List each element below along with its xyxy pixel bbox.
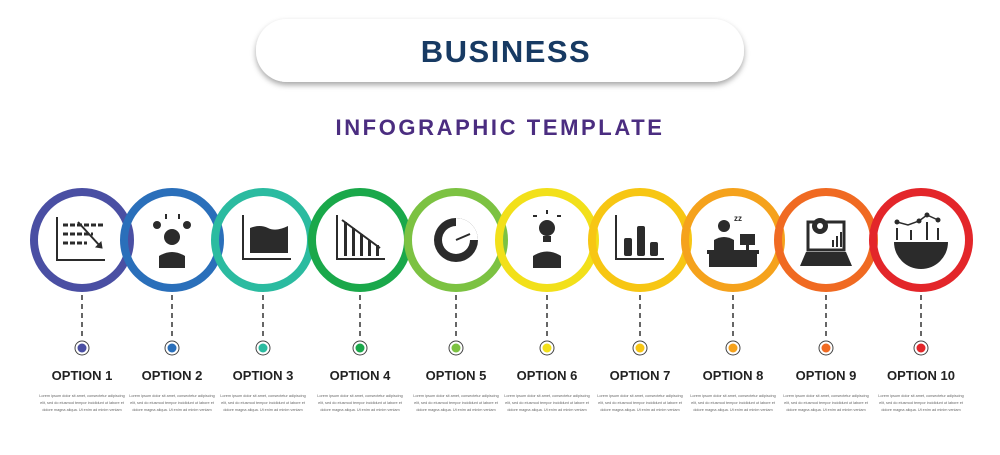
option 6: elit, sed do eiusmod tempor incididunt ut labore et bbox=[505, 401, 590, 405]
option 9 bbox=[778, 192, 874, 412]
icon: falling bars bbox=[337, 215, 385, 259]
option 9: dolore magna aliqua. Ut enim ad minim veniam bbox=[786, 408, 866, 412]
option 1: Lorem ipsum dolor sit amet, consectetur adipiscing bbox=[39, 394, 125, 398]
option 1 bbox=[34, 192, 130, 412]
option 1: dolore magna aliqua. Ut enim ad minim veniam bbox=[42, 408, 122, 412]
option 2: dolore magna aliqua. Ut enim ad minim veniam bbox=[132, 408, 212, 412]
option 8 bbox=[685, 192, 781, 412]
option 10: elit, sed do eiusmod tempor incididunt ut labore et bbox=[879, 401, 964, 405]
option 8: elit, sed do eiusmod tempor incididunt ut labore et bbox=[691, 401, 776, 405]
icon: sleeping worker at desk: zz bbox=[734, 214, 742, 223]
option 4: dolore magna aliqua. Ut enim ad minim veniam bbox=[320, 408, 400, 412]
option 5: Lorem ipsum dolor sit amet, consectetur adipiscing bbox=[413, 394, 499, 398]
option 7: Lorem ipsum dolor sit amet, consectetur adipiscing bbox=[597, 394, 683, 398]
option 6 bbox=[499, 192, 595, 412]
subtitle: INFOGRAPHIC TEMPLATE bbox=[335, 115, 665, 140]
option 8: dolore magna aliqua. Ut enim ad minim veniam bbox=[693, 408, 773, 412]
option 5: elit, sed do eiusmod tempor incididunt ut labore et bbox=[414, 401, 499, 405]
icon: coin stacks bbox=[616, 215, 664, 259]
option 2: elit, sed do eiusmod tempor incididunt ut labore et bbox=[130, 401, 215, 405]
option 1: elit, sed do eiusmod tempor incididunt ut labore et bbox=[40, 401, 125, 405]
icon: laptop analytics bbox=[800, 218, 852, 266]
option 6: OPTION 6 bbox=[517, 368, 577, 383]
option 7: elit, sed do eiusmod tempor incididunt ut labore et bbox=[598, 401, 683, 405]
option 5: dolore magna aliqua. Ut enim ad minim veniam bbox=[416, 408, 496, 412]
option 2 bbox=[124, 192, 220, 412]
option 7: OPTION 7 bbox=[610, 368, 670, 383]
title: BUSINESS bbox=[421, 34, 591, 69]
icon: idea person bbox=[533, 210, 561, 268]
icon: area chart bbox=[243, 215, 291, 259]
option 6: dolore magna aliqua. Ut enim ad minim veniam bbox=[507, 408, 587, 412]
icon: pie gauge bbox=[434, 218, 478, 262]
option 10 bbox=[873, 192, 969, 412]
option 9: Lorem ipsum dolor sit amet, consectetur adipiscing bbox=[783, 394, 869, 398]
option 4: elit, sed do eiusmod tempor incididunt ut labore et bbox=[318, 401, 403, 405]
option 10: dolore magna aliqua. Ut enim ad minim veniam bbox=[881, 408, 961, 412]
icon: angry person bbox=[153, 214, 191, 268]
option 3: Lorem ipsum dolor sit amet, consectetur adipiscing bbox=[220, 394, 306, 398]
option 5 bbox=[408, 192, 504, 412]
option 10: OPTION 10 bbox=[887, 368, 955, 383]
option 6: Lorem ipsum dolor sit amet, consectetur adipiscing bbox=[504, 394, 590, 398]
option 3: dolore magna aliqua. Ut enim ad minim veniam bbox=[223, 408, 303, 412]
option 4 bbox=[312, 192, 408, 412]
option 4: OPTION 4 bbox=[330, 368, 391, 383]
option 2: OPTION 2 bbox=[142, 368, 202, 383]
option 7 bbox=[592, 192, 688, 412]
title pill bbox=[256, 19, 744, 82]
option 3 bbox=[215, 192, 311, 412]
option 4: Lorem ipsum dolor sit amet, consectetur adipiscing bbox=[317, 394, 403, 398]
option 9: elit, sed do eiusmod tempor incididunt ut labore et bbox=[784, 401, 869, 405]
option 8: OPTION 8 bbox=[703, 368, 763, 383]
icon: sleeping worker at desk bbox=[707, 214, 759, 267]
icon: declining chart bbox=[57, 217, 105, 260]
option 10: Lorem ipsum dolor sit amet, consectetur adipiscing bbox=[878, 394, 964, 398]
option 1: OPTION 1 bbox=[52, 368, 112, 383]
option 3: elit, sed do eiusmod tempor incididunt ut labore et bbox=[221, 401, 306, 405]
option 3: OPTION 3 bbox=[233, 368, 293, 383]
option 8: Lorem ipsum dolor sit amet, consectetur adipiscing bbox=[690, 394, 776, 398]
option 7: dolore magna aliqua. Ut enim ad minim veniam bbox=[600, 408, 680, 412]
option 9: OPTION 9 bbox=[796, 368, 856, 383]
icon: bowl line chart bbox=[894, 212, 948, 269]
option 2: Lorem ipsum dolor sit amet, consectetur adipiscing bbox=[129, 394, 215, 398]
option 5: OPTION 5 bbox=[426, 368, 486, 383]
